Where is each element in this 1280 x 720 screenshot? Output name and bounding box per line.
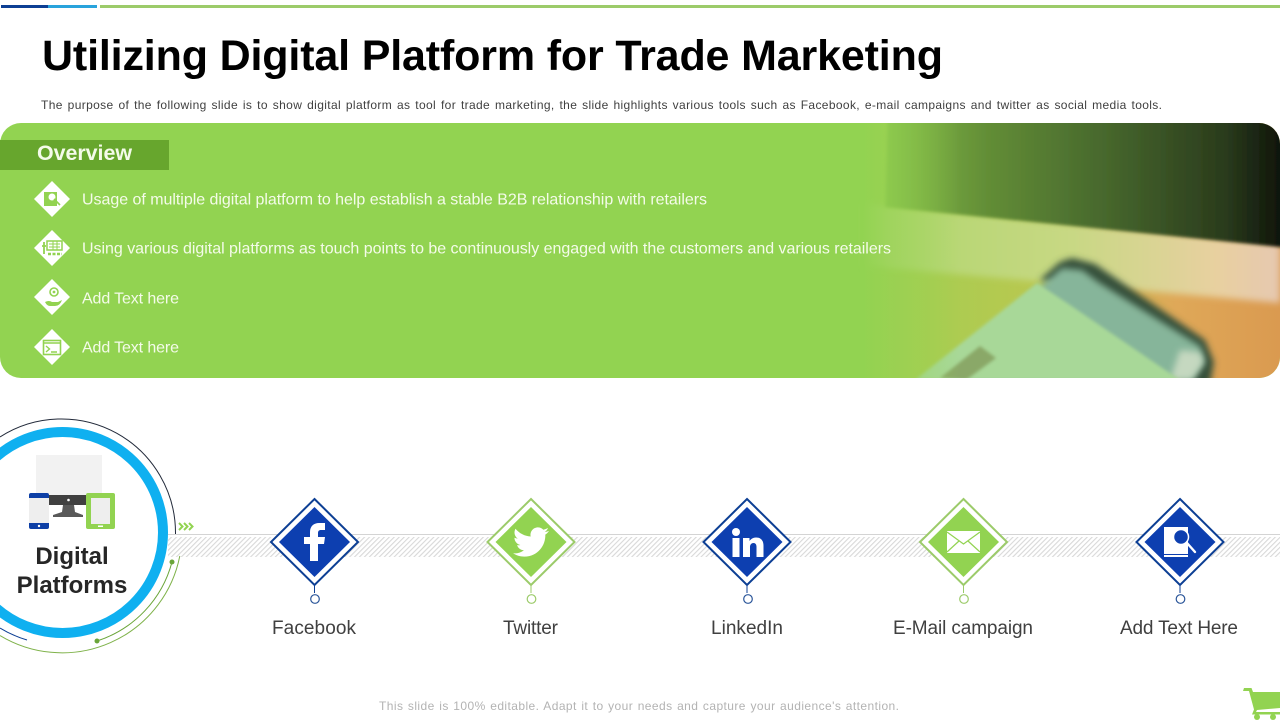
bullet 1 xyxy=(34,181,707,217)
bullet 4: Add Text here xyxy=(82,340,179,356)
bullet 2 xyxy=(34,230,891,266)
label: LinkedIn xyxy=(711,618,783,639)
bullet 1: Usage of multiple digital platform to help establish a stable B2B relationship with retailers xyxy=(82,192,707,208)
subtitle: The purpose of the following slide is to show digital platform as tool for trade marketing, the slide highlights various tools such as Facebook, e-mail campaigns and twitter as social media tools. xyxy=(41,98,1162,112)
hub label: Platforms xyxy=(17,572,127,599)
node: add text here xyxy=(1120,499,1238,639)
photo: blurred phone on desk xyxy=(878,123,1280,378)
label: Facebook xyxy=(272,618,356,639)
timeline band xyxy=(168,534,1280,557)
overview heading: Overview xyxy=(37,141,132,165)
icon: chevrons xyxy=(179,523,192,530)
label: E-Mail campaign xyxy=(893,618,1033,639)
title: Utilizing Digital Platform for Trade Marketing xyxy=(42,32,943,80)
label: Twitter xyxy=(503,618,559,639)
top accent bars xyxy=(1,5,1280,8)
label: Add Text Here xyxy=(1120,618,1238,639)
node: facebook xyxy=(271,499,358,639)
node: twitter xyxy=(488,499,574,639)
panel: overview xyxy=(0,110,1280,385)
bullet 3 xyxy=(34,279,179,315)
overview heading xyxy=(0,140,169,170)
footer note: This slide is 100% editable. Adapt it to your needs and capture your audience's attention. xyxy=(379,699,899,713)
thin outer arcs xyxy=(0,419,180,653)
hub: digital platforms xyxy=(0,419,192,653)
bullet 3: Add Text here xyxy=(82,290,179,308)
icon: devices xyxy=(29,455,115,529)
node: e-mail campaign xyxy=(893,499,1033,639)
icon: shopping cart xyxy=(1243,688,1280,720)
bullet 2: Using various digital platforms as touch points to be continuously engaged with the customers and various retailers xyxy=(82,240,891,258)
node: linkedin xyxy=(704,499,790,639)
bullet 4 xyxy=(34,329,179,365)
hub label: Digital xyxy=(35,543,109,570)
